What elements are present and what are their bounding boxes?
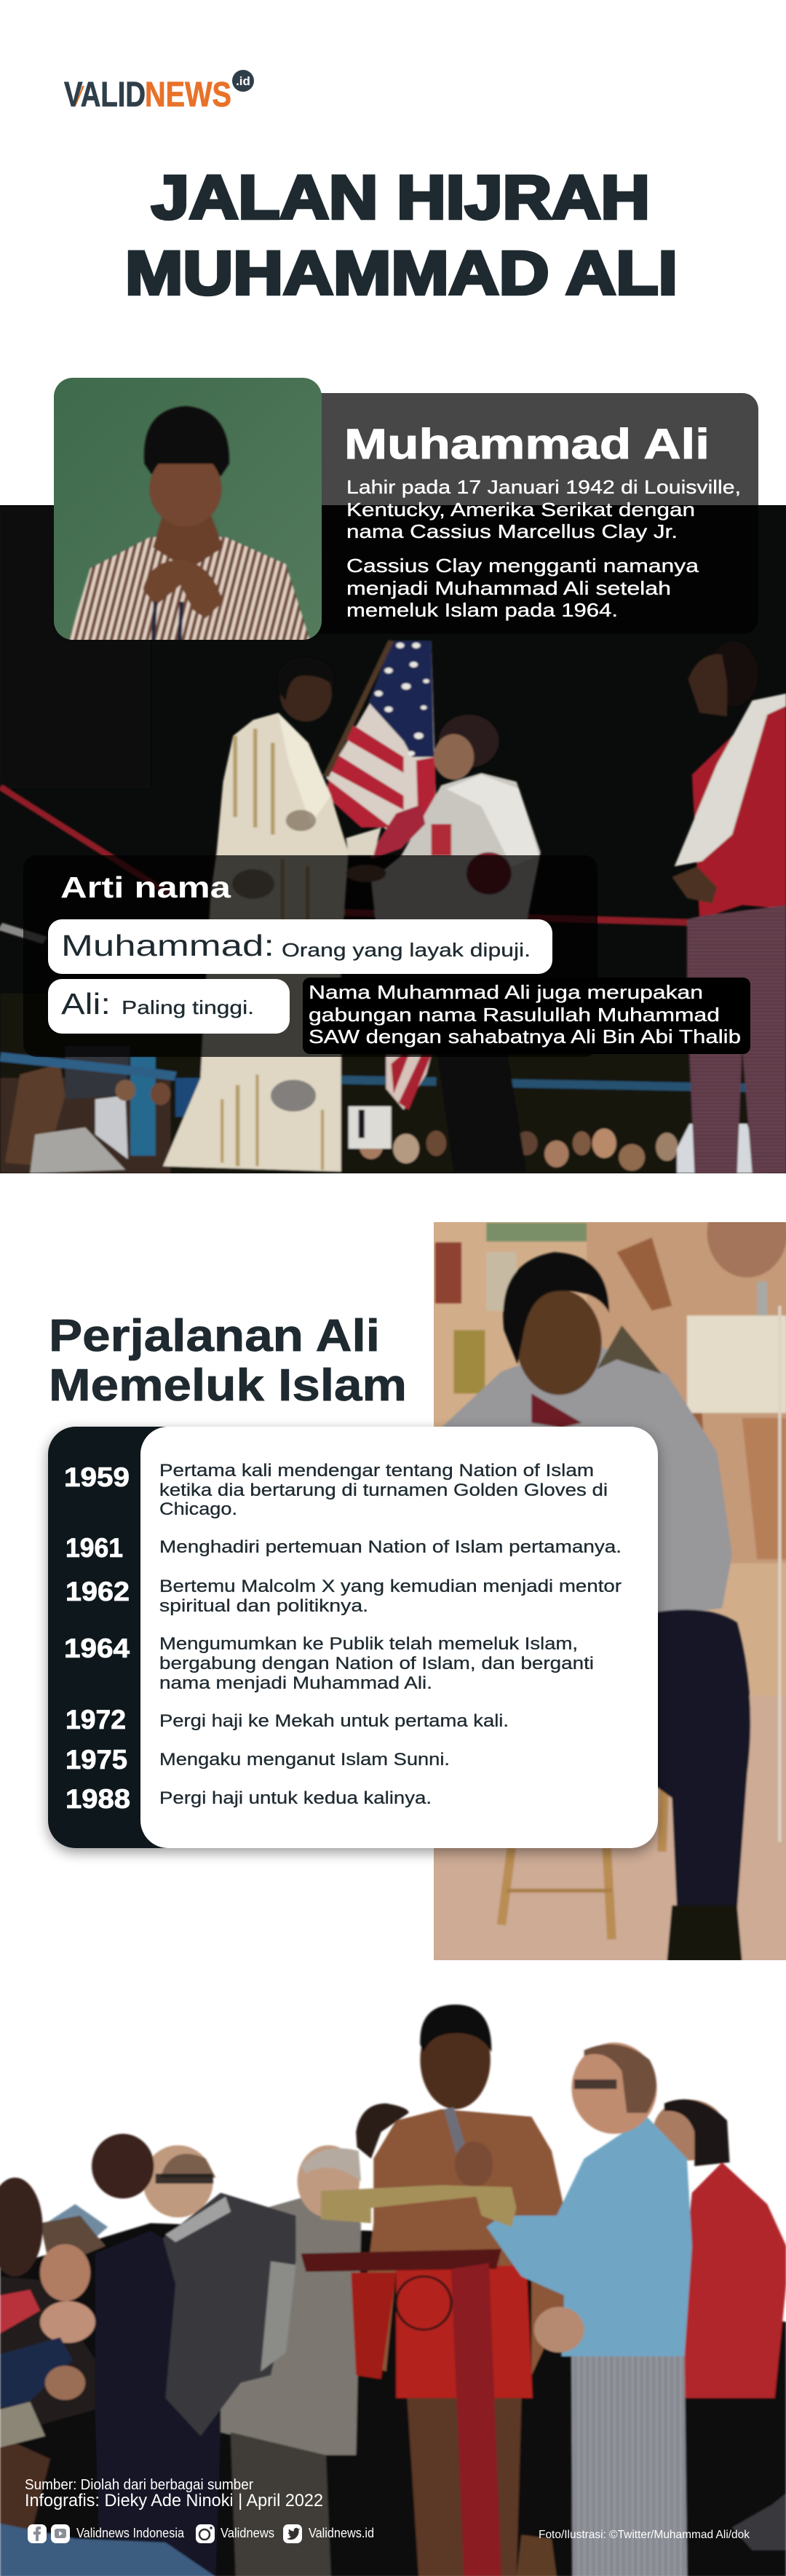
heading: perjalanan: Memeluk Islam <box>49 1360 407 1411</box>
events: Mengaku menganut Islam Sunni. <box>159 1750 450 1769</box>
callout: name origin <box>303 978 750 1054</box>
back man <box>356 2104 409 2158</box>
card: Muhammad meaning: Muhammad: <box>61 929 274 962</box>
Ali robe <box>163 713 349 1171</box>
coach trousers <box>436 1046 526 1171</box>
photographer hand <box>92 2134 154 2198</box>
podium and scale <box>301 2249 501 2272</box>
social icons and handles: Validnews Indonesia <box>76 2526 185 2540</box>
credits: source and author <box>25 2477 323 2510</box>
grey suit man <box>221 2197 361 2455</box>
events: Pertama kali mendengar tentang Nation of Islam <box>159 1461 594 1481</box>
years: 1964 <box>64 1633 130 1663</box>
events: Pergi haji untuk kedua kalinya. <box>159 1788 432 1808</box>
flag <box>326 641 437 838</box>
photo: Ali in the gym <box>434 1188 786 1962</box>
text: birth: nama Cassius Marcellus Clay Jr. <box>346 520 678 542</box>
mic cluster <box>163 2192 296 2436</box>
coach <box>370 772 541 919</box>
callout: name origin: Nama Muhammad Ali juga merupakan <box>309 981 703 1003</box>
years: 1959 <box>64 1462 130 1492</box>
logo: Validnews.id: VALID <box>64 76 146 114</box>
blue jacket man <box>571 2349 687 2576</box>
events: Menghadiri pertemuan Nation of Islam pertamanya. <box>159 1537 622 1557</box>
heading: perjalanan <box>49 1311 407 1411</box>
events: Chicago. <box>159 1499 237 1519</box>
credits: source and author: Infografis: Dieky Ade Ninoki | April 2022 <box>25 2491 323 2510</box>
years: 1972 <box>66 1705 126 1735</box>
logo: Validnews.id <box>64 70 254 114</box>
icon: instagram <box>196 2524 215 2543</box>
years: 1962 <box>66 1577 130 1606</box>
head <box>517 1290 602 1395</box>
card: Muhammad meaning: Orang yang layak dipuji. <box>282 939 531 961</box>
events: Bertemu Malcolm X yang kemudian menjadi mentor <box>159 1577 622 1596</box>
social icons and handles: Validnews.id <box>309 2526 374 2540</box>
heading: arti nama: Arti nama <box>60 871 231 904</box>
logo: Validnews.id: .id <box>236 74 250 88</box>
events <box>159 1461 622 1808</box>
back red man <box>682 2163 786 2398</box>
bald man and dark suit <box>95 2231 221 2576</box>
card: Ali meaning <box>48 979 290 1034</box>
callout: name origin: gabungan nama Rasulullah Muhammad <box>309 1004 720 1026</box>
left people <box>0 2178 43 2276</box>
events: ketika dia bertarung di turnamen Golden Gloves di <box>159 1481 608 1500</box>
events: bergabung dengan Nation of Islam, dan berganti <box>159 1654 594 1673</box>
social icons and handles: Validnews <box>221 2526 274 2540</box>
right man <box>692 697 786 919</box>
photo: Ali in the boxing ring <box>0 505 786 1173</box>
card: Ali meaning: Ali: <box>61 987 111 1021</box>
years <box>64 1462 130 1814</box>
foreground <box>0 2524 215 2576</box>
rope: red <box>0 787 170 895</box>
title <box>125 163 678 307</box>
panel: arti nama <box>23 855 598 1057</box>
icon: youtube <box>51 2524 70 2543</box>
years: 1975 <box>66 1745 127 1775</box>
timeline card <box>48 1427 658 1852</box>
events: Mengumumkan ke Publik telah memeluk Islam, <box>159 1634 578 1654</box>
years: 1988 <box>66 1784 130 1814</box>
portrait photo <box>54 378 322 643</box>
photo: weigh-in crowd <box>0 2005 786 2576</box>
text: birth: Lahir pada 17 Januari 1942 di Louisville, <box>346 476 741 498</box>
Ali <box>366 2109 567 2375</box>
text: birth <box>346 476 741 542</box>
events: spiritual dan politiknya. <box>159 1596 368 1616</box>
callout: name origin: SAW dengan sahabatnya Ali Bin Abi Thalib <box>309 1026 741 1047</box>
text: name change: Cassius Clay mengganti namanya <box>346 555 699 576</box>
title: MUHAMMAD ALI <box>125 239 678 307</box>
heading: perjalanan: Perjalanan Ali <box>49 1311 380 1361</box>
icon: twitter <box>283 2524 302 2543</box>
heading: Muhammad Ali: Muhammad Ali <box>344 421 710 468</box>
logo: Validnews.id: NEWS <box>145 76 231 114</box>
text: name change <box>346 555 699 621</box>
crowd faces <box>115 1079 678 1171</box>
trousers <box>658 1609 752 1907</box>
card: Muhammad meaning <box>48 919 552 974</box>
events: Pergi haji ke Mekah untuk pertama kali. <box>159 1711 509 1731</box>
text: birth: Kentucky, Amerika Serikat dengan <box>346 499 695 520</box>
title: JALAN HIJRAH <box>151 163 650 231</box>
panel: biography <box>313 393 758 634</box>
gloves <box>371 804 425 860</box>
hoodie <box>434 1347 732 1617</box>
dark backdrop <box>0 2223 786 2576</box>
Ali head <box>279 674 333 722</box>
photo credit: Foto/Ilustrasi: ©Twitter/Muhammad Ali/dok <box>539 2529 750 2541</box>
hood <box>597 1325 662 1374</box>
stool <box>496 1788 670 1941</box>
text: name change: memeluk Islam pada 1964. <box>346 599 618 621</box>
card: Ali meaning: Paling tinggi. <box>122 996 254 1018</box>
left dark mass <box>0 2443 51 2530</box>
events: nama menjadi Muhammad Ali. <box>159 1673 432 1693</box>
icon: facebook <box>28 2524 47 2543</box>
social icons and handles <box>28 2524 374 2543</box>
text: name change: menjadi Muhammad Ali setelah <box>346 577 671 599</box>
years: 1961 <box>66 1533 123 1563</box>
credits: source and author: Sumber: Diolah dari berbagai sumber <box>25 2477 253 2493</box>
crowd bottom <box>396 1092 786 1173</box>
